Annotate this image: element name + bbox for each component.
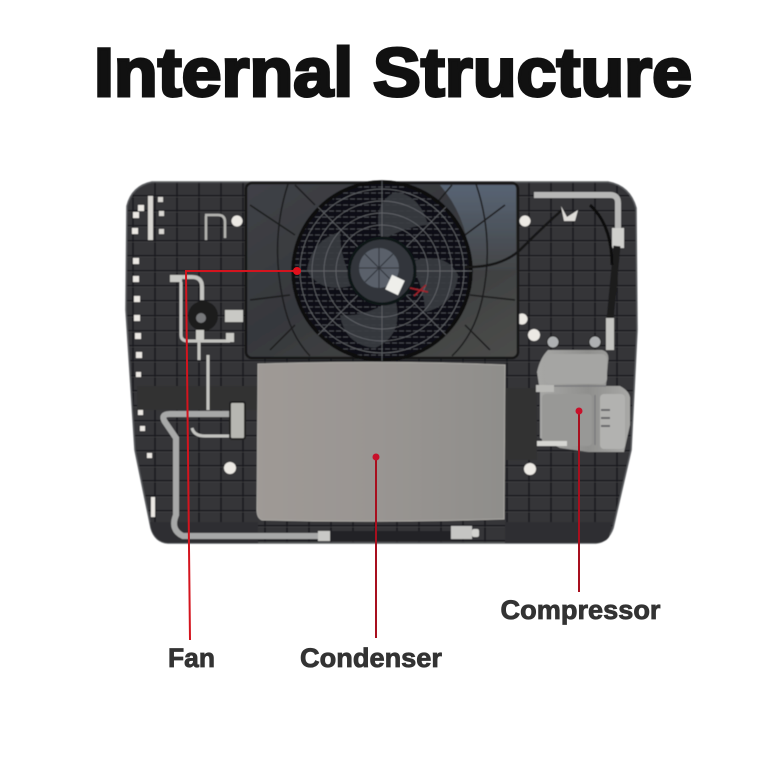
- pointer line: fan: [186, 267, 301, 640]
- red wires: [410, 285, 428, 296]
- pointer line: condenser: [372, 454, 380, 638]
- label: compressor: Compressor: [500, 595, 661, 625]
- top left pipe: [205, 215, 225, 240]
- motor label: [385, 275, 405, 295]
- small fittings: [170, 275, 243, 342]
- label: fan: Fan: [168, 643, 215, 673]
- wire: [465, 210, 562, 267]
- expansion block: [230, 402, 245, 439]
- lower hose fitting: [606, 318, 614, 350]
- fan grille: [292, 181, 472, 361]
- shroud right tint: [440, 185, 516, 270]
- plate dark lower band: [137, 386, 537, 460]
- air conditioner unit: [126, 181, 637, 543]
- white clip: [561, 206, 578, 221]
- title: Internal Structure: [94, 34, 692, 111]
- right hose: [610, 246, 617, 320]
- right pipe fitting: [612, 228, 624, 248]
- lower hose and fitting: [318, 526, 479, 541]
- plate mounting holes: [132, 205, 540, 517]
- top left window: [148, 196, 164, 240]
- fan blades: [307, 192, 458, 348]
- compressor bolts: [547, 336, 559, 348]
- label: condenser: Condenser: [300, 643, 442, 673]
- pointer line: compressor: [576, 408, 582, 592]
- left refrigerant pipes: [163, 277, 318, 536]
- shroud corner ribs: [250, 184, 515, 356]
- condenser: [257, 362, 505, 521]
- panel: fan shroud: [246, 181, 562, 361]
- top right pipe: [534, 195, 618, 235]
- panel: black back plate: [126, 182, 637, 543]
- fan motor hub: [349, 238, 415, 304]
- drier receiver: [188, 301, 218, 331]
- compressor: [536, 350, 630, 452]
- grille rings: [292, 181, 472, 361]
